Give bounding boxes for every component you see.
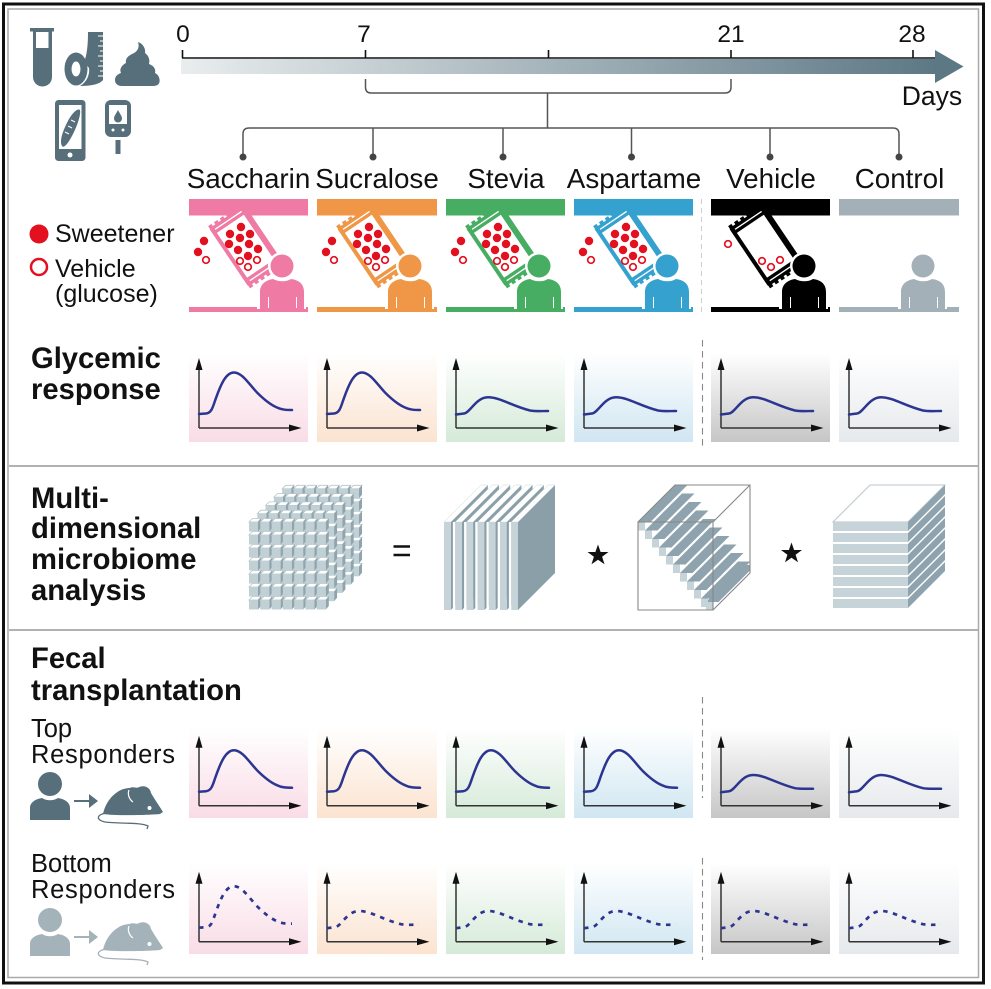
heading: fecal transplantation: transplantation bbox=[31, 675, 242, 707]
icon: stool bbox=[115, 42, 160, 86]
heading: microbiome analysis bbox=[31, 483, 201, 607]
bottom responders label: Bottom bbox=[31, 850, 112, 878]
heading: microbiome analysis: analysis bbox=[31, 575, 146, 607]
heading: microbiome analysis: Multi- bbox=[31, 483, 109, 515]
legend: Sweetener bbox=[55, 220, 175, 248]
chart: vehicle bbox=[711, 353, 830, 442]
chart: vehicle bbox=[711, 863, 830, 954]
chart: vehicle bbox=[711, 728, 830, 818]
panel: aspartame intake bbox=[574, 199, 693, 312]
cube: full data tensor bbox=[249, 485, 362, 610]
cube: horizontal slabs bbox=[833, 485, 945, 608]
chart row: glycemic response bbox=[189, 353, 959, 442]
timeline day labels: 28 bbox=[898, 21, 926, 48]
chart: saccharin bbox=[189, 353, 308, 442]
vertical separators bbox=[700, 199, 702, 312]
top responders label: Responders bbox=[31, 741, 175, 769]
chart: stevia bbox=[446, 353, 565, 442]
timeline day labels bbox=[176, 21, 926, 48]
group labels: Aspartame bbox=[567, 163, 701, 194]
group labels: Saccharin bbox=[187, 163, 310, 194]
group labels: Sucralose bbox=[315, 163, 439, 194]
panel: vehicle intake bbox=[711, 199, 830, 312]
heading: glycemic response bbox=[31, 343, 161, 406]
icon: test tube bbox=[30, 28, 54, 86]
panel: stevia intake bbox=[446, 199, 565, 312]
legend: (glucose) bbox=[55, 280, 158, 308]
icon: phone with food bbox=[55, 100, 86, 161]
chart: aspartame bbox=[574, 863, 693, 954]
group labels bbox=[187, 163, 944, 194]
heading: microbiome analysis: dimensional bbox=[31, 513, 201, 545]
timeline day labels: 21 bbox=[717, 21, 745, 48]
heading: fecal transplantation bbox=[31, 643, 242, 707]
icons: data collection bbox=[30, 28, 160, 161]
star bbox=[781, 542, 802, 562]
chart row: bottom responders bbox=[189, 863, 959, 954]
icon: glucose meter bbox=[105, 100, 131, 154]
connector tree bbox=[240, 79, 902, 160]
icon: bottom responder to mouse bbox=[30, 908, 163, 965]
top responders label: Top bbox=[31, 715, 72, 743]
chart: aspartame bbox=[574, 353, 693, 442]
panel: sucralose intake bbox=[317, 199, 437, 312]
heading: glycemic response: Glycemic bbox=[31, 343, 161, 375]
chart: aspartame bbox=[574, 728, 693, 818]
cube: diagonal slices bbox=[638, 485, 756, 610]
group labels: Vehicle bbox=[726, 163, 816, 194]
legend bbox=[30, 220, 175, 308]
days axis label: Days bbox=[902, 81, 962, 111]
legend: Vehicle bbox=[55, 255, 136, 283]
bottom responders label bbox=[31, 850, 175, 904]
chart: stevia bbox=[446, 863, 565, 954]
panel: saccharin intake bbox=[189, 199, 308, 312]
group labels: Control bbox=[855, 163, 944, 194]
panel: control bbox=[839, 199, 959, 312]
chart: stevia bbox=[446, 728, 565, 818]
chart: control bbox=[839, 353, 959, 442]
timeline day labels: 7 bbox=[357, 21, 371, 48]
chart: sucralose bbox=[317, 863, 437, 954]
chart: sucralose bbox=[317, 728, 437, 818]
chart: control bbox=[839, 728, 959, 818]
chart: control bbox=[839, 863, 959, 954]
chart: saccharin bbox=[189, 728, 308, 818]
star bbox=[588, 544, 608, 564]
chart: sucralose bbox=[317, 353, 437, 442]
heading: glycemic response: response bbox=[31, 374, 161, 406]
group labels: Stevia bbox=[467, 163, 545, 194]
bottom responders label: Responders bbox=[31, 876, 175, 904]
equals sign bbox=[394, 546, 410, 555]
chart row: top responders bbox=[189, 728, 959, 818]
timeline arrow bbox=[176, 21, 964, 111]
icon: top responder to mouse bbox=[30, 772, 163, 829]
icon: measuring tape bbox=[64, 32, 103, 86]
timeline day labels: 0 bbox=[176, 21, 190, 48]
cube: vertical slices bbox=[444, 485, 555, 610]
heading: microbiome analysis: microbiome bbox=[31, 544, 196, 576]
chart: saccharin bbox=[189, 863, 308, 954]
heading: fecal transplantation: Fecal bbox=[31, 643, 106, 675]
top responders label bbox=[31, 715, 175, 769]
